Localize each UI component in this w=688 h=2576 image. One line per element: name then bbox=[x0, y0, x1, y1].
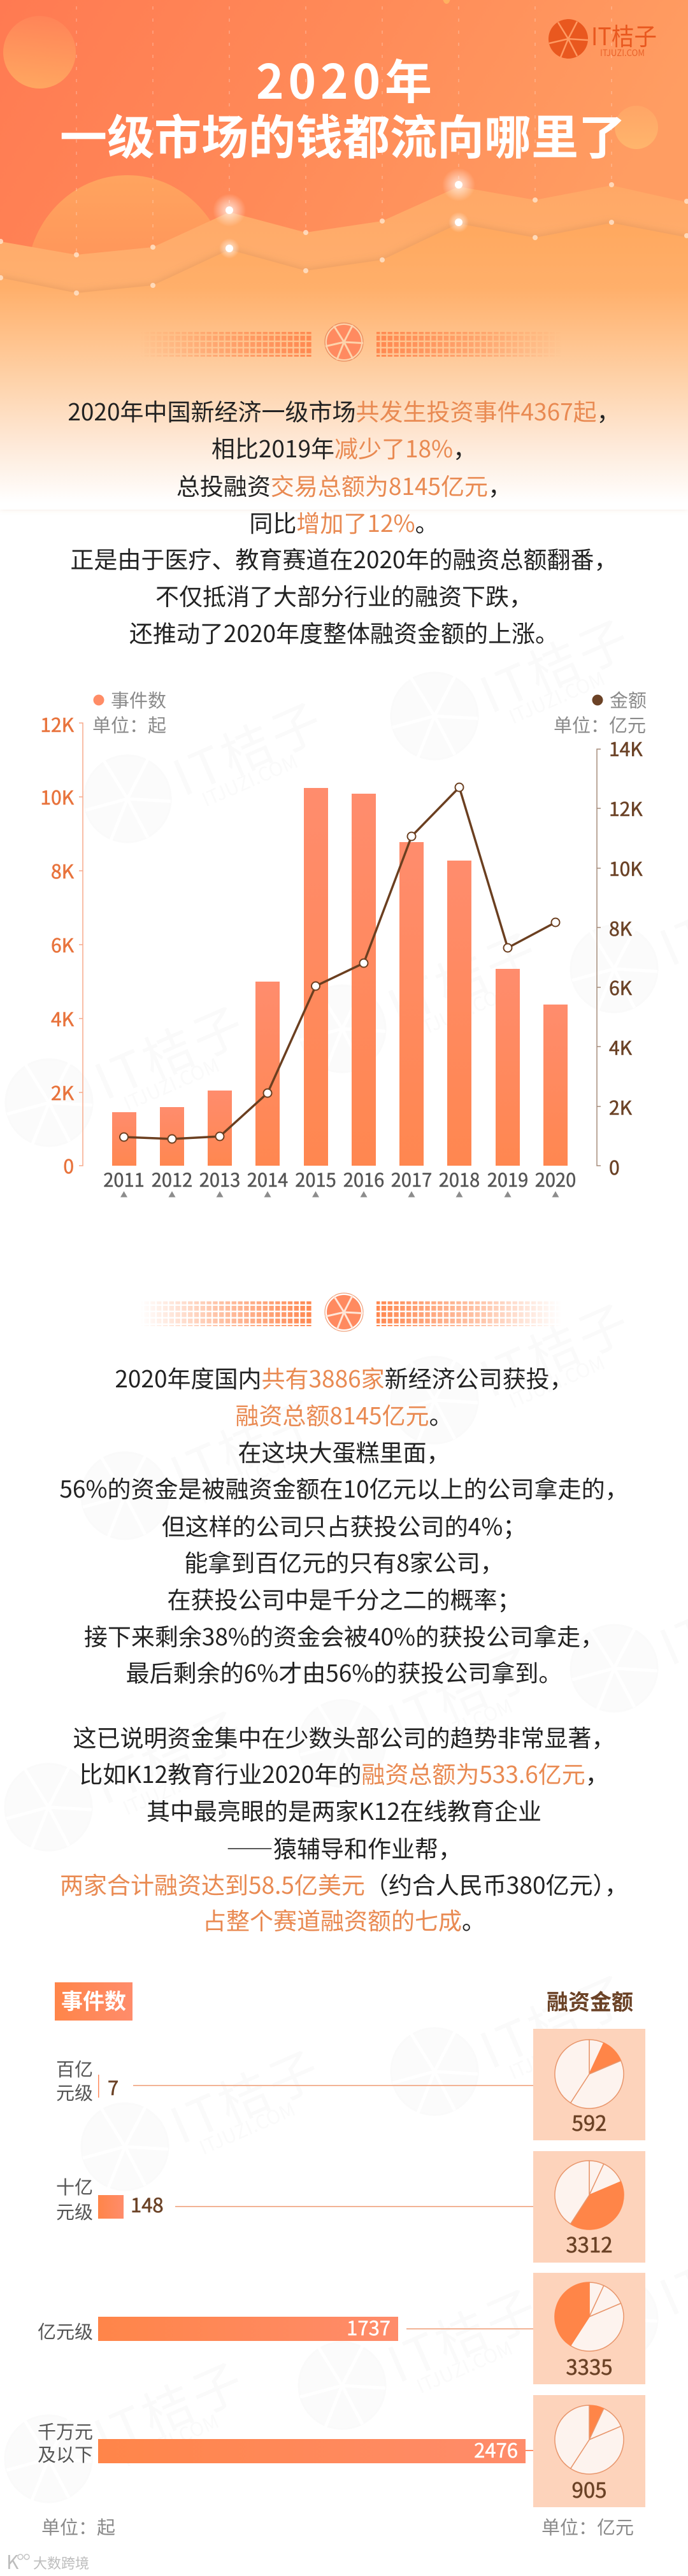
pie panel: 3312 bbox=[533, 2151, 645, 2263]
source watermark bbox=[6, 2547, 89, 2575]
text block: overview: 不仅抵消了大部分行业的融资下跌， bbox=[155, 578, 533, 612]
text block: K12 example bbox=[60, 1719, 628, 1936]
text block: K12 example: 其中最亮眼的是两家K12在线教育企业 bbox=[147, 1792, 541, 1827]
watermarks: IT桔子 bbox=[468, 599, 642, 727]
source watermark: 大数跨境 bbox=[33, 2552, 89, 2573]
watermarks: ITJUZI.COM bbox=[118, 1050, 224, 1116]
text block: funding concentration: 接下来剩余38%的资金会被40%的获投公司拿走， bbox=[84, 1618, 604, 1652]
legend: events: 事件数 bbox=[111, 686, 166, 713]
legend: funding bbox=[554, 686, 647, 738]
logo: IT桔子: IT桔子 bbox=[591, 17, 657, 52]
logo: IT桔子: ITJUZI.COM bbox=[600, 47, 645, 59]
row: 百亿元级: 7 bbox=[108, 2072, 118, 2101]
row: 十亿元级 bbox=[56, 2173, 533, 2224]
heading: 事件数 bbox=[55, 1982, 133, 2021]
text block: overview bbox=[68, 393, 620, 649]
text block: overview: 还推动了2020年度整体融资金额的上涨。 bbox=[129, 615, 559, 649]
source watermark: K bbox=[6, 2547, 19, 2575]
unit: events: 单位：起 bbox=[41, 2513, 115, 2540]
left axis: 10K bbox=[40, 782, 75, 810]
watermarks: IT桔子 bbox=[376, 912, 550, 1040]
watermarks: IT桔子 bbox=[82, 2342, 256, 2470]
left axis: 4K bbox=[51, 1004, 75, 1032]
pie panel: 3312: 3312 bbox=[566, 2228, 613, 2259]
pie panel: 3335: 3335 bbox=[566, 2351, 613, 2381]
text block: overview: 正是由于医疗、教育赛道在2020年的融资总额翻番， bbox=[70, 541, 618, 575]
pie panel: 905: 905 bbox=[572, 2473, 606, 2504]
text block: overview: 相比2019年减少了18%， bbox=[211, 430, 477, 464]
text block: K12 example: 占整个赛道融资额的七成。 bbox=[203, 1902, 485, 1936]
right axis: 12K bbox=[609, 794, 643, 822]
year labels: 2012 bbox=[152, 1166, 192, 1192]
row: 千万元及以下: 千万元 bbox=[38, 2417, 93, 2444]
watermarks: ITJUZI.COM bbox=[118, 1754, 223, 1821]
watermarks bbox=[5, 599, 688, 2502]
year labels: 2020 bbox=[535, 1166, 576, 1192]
legend: funding: 单位：亿元 bbox=[554, 711, 646, 738]
text block: K12 example: 这已说明资金集中在少数头部公司的趋势非常显著， bbox=[73, 1719, 615, 1754]
watermarks: IT桔子 bbox=[161, 682, 335, 810]
row: 亿元级: 亿元级 bbox=[38, 2317, 93, 2344]
text block: K12 example: 比如K12教育行业2020年的融资总额为533.6亿元， bbox=[79, 1756, 609, 1790]
year labels: 2016 bbox=[343, 1166, 384, 1192]
row: 千万元及以下 bbox=[38, 2417, 533, 2467]
divider: top orange icon bbox=[140, 323, 561, 361]
text block: K12 example: 两家合计融资达到58.5亿美元（约合人民币380亿元）， bbox=[60, 1866, 628, 1901]
text block: overview: 总投融资交易总额为8145亿元， bbox=[176, 468, 512, 502]
text block: K12 example: ——猿辅导和作业帮， bbox=[226, 1830, 462, 1864]
left axis bbox=[40, 710, 83, 1179]
row: 亿元级: 1737 bbox=[347, 2312, 391, 2341]
watermarks: ITJUZI.COM bbox=[412, 2333, 517, 2399]
pie panel: 592: 592 bbox=[572, 2107, 606, 2137]
watermarks: IT桔子 bbox=[376, 2268, 550, 2397]
year labels: 2015 bbox=[295, 1166, 336, 1192]
left axis: 6K bbox=[51, 930, 75, 958]
left axis: 12K bbox=[40, 710, 75, 738]
unit: funding: 单位：亿元 bbox=[541, 2513, 634, 2540]
text block: overview: 同比增加了12%。 bbox=[249, 504, 439, 539]
title: 2020年 bbox=[256, 45, 432, 113]
right axis: 10K bbox=[609, 854, 643, 882]
text block: funding concentration: 在这块大蛋糕里面， bbox=[238, 1434, 450, 1468]
line: funding bbox=[120, 784, 559, 1143]
year labels: 2019 bbox=[487, 1166, 528, 1192]
chart: events and funding by round size bbox=[38, 1982, 645, 2540]
watermarks: ITJUZI.COM bbox=[118, 2406, 223, 2472]
pie panel: 3335 bbox=[533, 2273, 645, 2384]
row: 百亿元级: 元级 bbox=[56, 2079, 93, 2105]
row: 十亿元级: 148 bbox=[131, 2189, 164, 2218]
year labels: 2013 bbox=[199, 1166, 240, 1192]
watermarks: IT桔子 bbox=[468, 1954, 642, 2083]
right axis: 14K bbox=[609, 734, 643, 762]
row: 十亿元级: 元级 bbox=[56, 2198, 93, 2224]
right axis: 8K bbox=[609, 913, 633, 941]
text block: funding concentration: 56%的资金是被融资金额在10亿元以上的公司拿走的， bbox=[59, 1470, 629, 1505]
left axis: 2K bbox=[51, 1078, 75, 1106]
watermarks: ITJUZI.COM bbox=[194, 2094, 299, 2160]
heading: 事件数: 事件数 bbox=[61, 1984, 126, 2015]
pie panel: 905 bbox=[533, 2395, 645, 2507]
right axis: 4K bbox=[609, 1033, 633, 1061]
text block: funding concentration: 2020年度国内共有3886家新经济公司获投， bbox=[115, 1360, 573, 1394]
row: 百亿元级: 百亿 bbox=[56, 2055, 93, 2082]
year labels bbox=[103, 1166, 576, 1198]
text block: overview: 2020年中国新经济一级市场共发生投资事件4367起， bbox=[68, 393, 620, 427]
watermarks: ITJUZI.COM bbox=[504, 1347, 609, 1413]
row: 百亿元级 bbox=[56, 2055, 533, 2105]
watermarks: IT桔子 bbox=[83, 985, 257, 1114]
text block: funding concentration: 在获投公司中是千分之二的概率； bbox=[167, 1581, 521, 1615]
watermarks: ITJUZI.COM bbox=[197, 746, 302, 812]
watermarks: ITJUZI.COM bbox=[504, 2019, 609, 2085]
watermarks: IT桔子 bbox=[468, 1283, 642, 1412]
year labels: 2017 bbox=[391, 1166, 432, 1192]
text block: funding concentration: 融资总额8145亿元。 bbox=[235, 1397, 453, 1431]
divider: middle orange icon bbox=[140, 1293, 561, 1331]
row: 千万元及以下: 及以下 bbox=[38, 2440, 93, 2467]
right axis: 0 bbox=[609, 1152, 620, 1180]
watermarks: ITJUZI.COM bbox=[504, 663, 609, 729]
legend: events: 单位：起 bbox=[92, 711, 166, 738]
chart: events and funding 2011-2020 bbox=[40, 686, 647, 1198]
watermarks: IT桔子 bbox=[82, 1690, 256, 1819]
left axis: 0 bbox=[63, 1151, 74, 1179]
year labels: 2014 bbox=[247, 1166, 288, 1192]
row: 亿元级 bbox=[38, 2312, 533, 2344]
text block: funding concentration: 能拿到百亿元的只有8家公司， bbox=[184, 1544, 504, 1578]
watermarks: IT桔子 bbox=[159, 1378, 333, 1507]
right axis: 6K bbox=[609, 973, 633, 1001]
text block: funding concentration bbox=[59, 1360, 629, 1689]
watermarks: IT桔子 bbox=[376, 1626, 550, 1755]
bars: events bbox=[112, 788, 568, 1166]
right axis bbox=[597, 734, 643, 1180]
right axis: 2K bbox=[609, 1092, 633, 1120]
left axis: 8K bbox=[51, 856, 75, 884]
watermarks: IT桔子 bbox=[159, 2029, 333, 2158]
logo: IT桔子 bbox=[548, 17, 657, 59]
year labels: 2011 bbox=[103, 1166, 145, 1192]
heading: 融资金额: 融资金额 bbox=[547, 1985, 633, 2016]
pie panel: 592 bbox=[533, 2029, 645, 2140]
legend: funding: 金额 bbox=[610, 686, 647, 713]
header background bbox=[0, 0, 688, 510]
watermarks: ITJUZI.COM bbox=[412, 976, 517, 1042]
watermarks: ITJUZI.COM bbox=[194, 1443, 299, 1509]
row: 十亿元级: 十亿 bbox=[56, 2173, 93, 2200]
year labels: 2018 bbox=[439, 1166, 480, 1192]
row: 千万元及以下: 2476 bbox=[474, 2435, 518, 2463]
title: 一级市场的钱都流向哪里了 bbox=[60, 100, 626, 168]
watermarks: ITJUZI.COM bbox=[412, 1691, 517, 1757]
legend: events bbox=[92, 686, 166, 738]
title bbox=[60, 45, 626, 168]
text block: funding concentration: 但这样的公司只占获投公司的4%； bbox=[162, 1508, 526, 1542]
text block: funding concentration: 最后剩余的6%才由56%的获投公司拿到。 bbox=[126, 1654, 562, 1689]
